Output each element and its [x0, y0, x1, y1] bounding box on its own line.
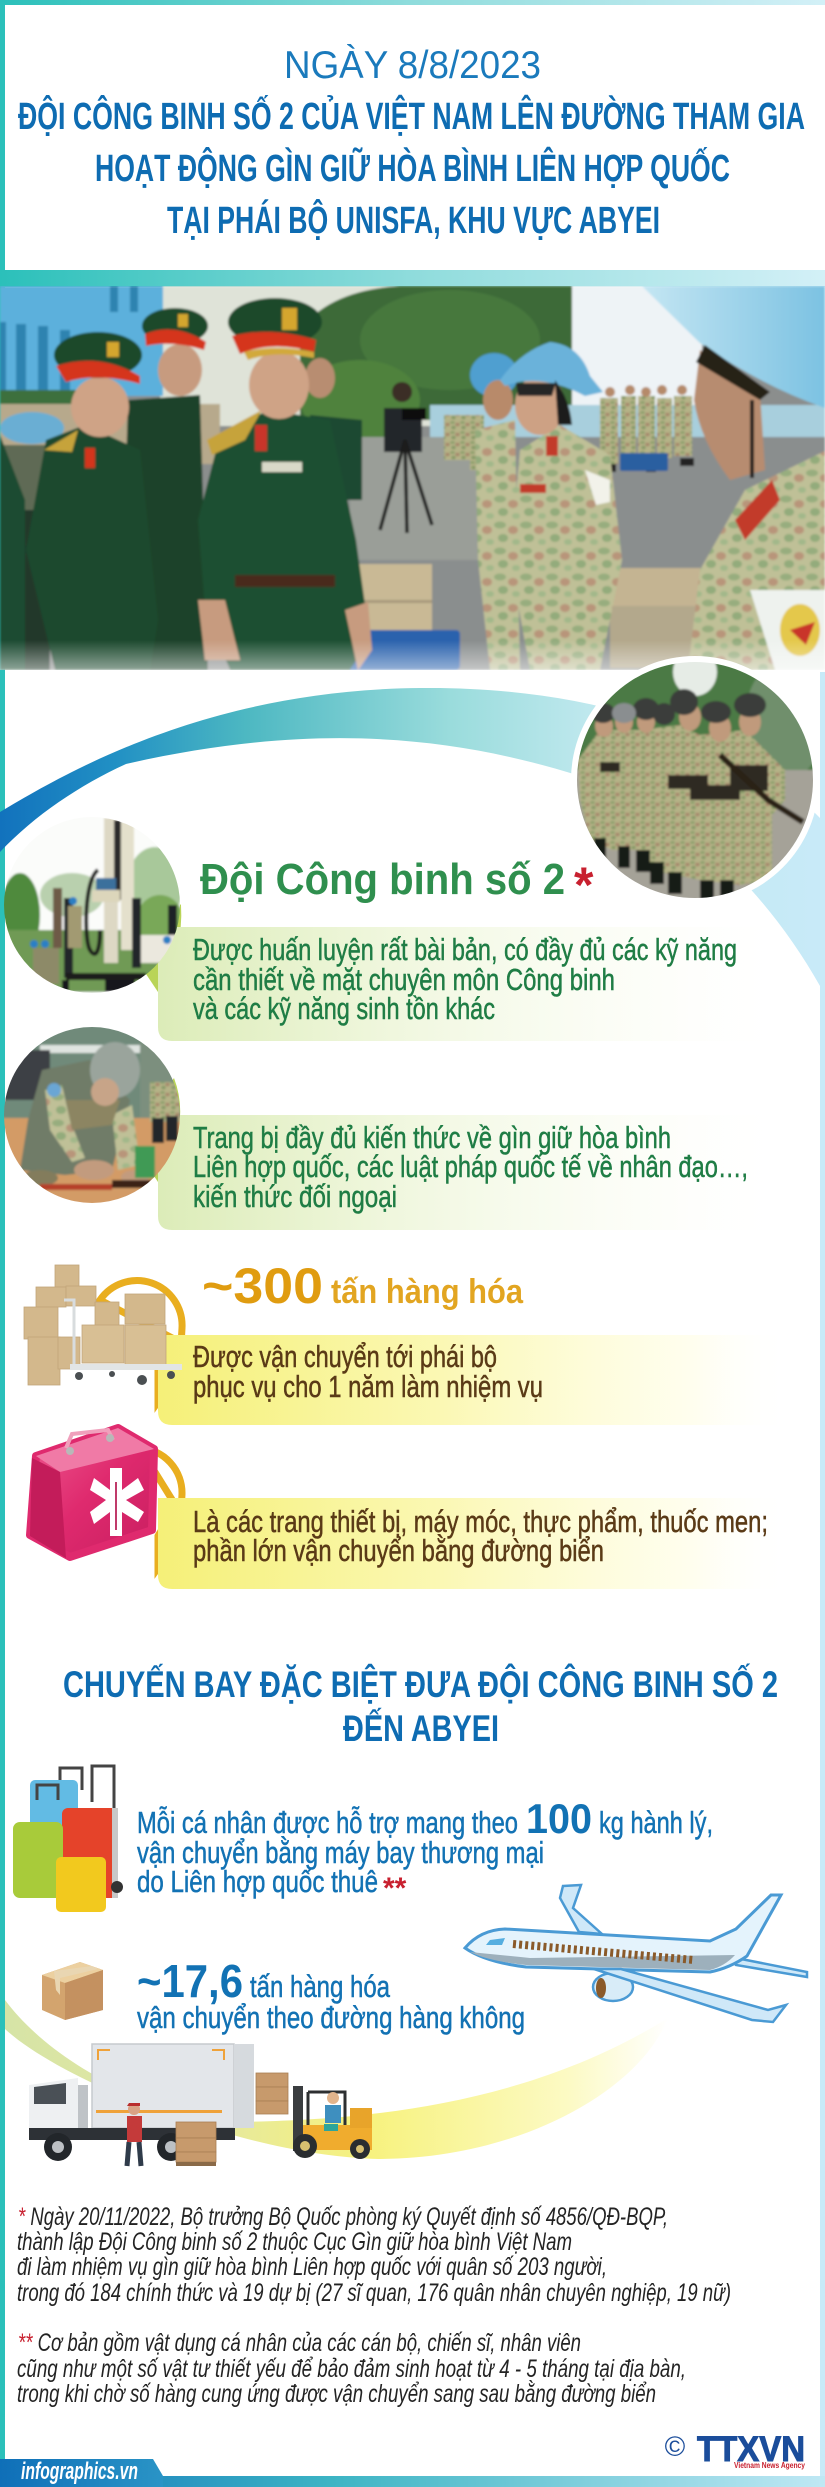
header panel — [5, 5, 825, 270]
teal band under header — [0, 270, 825, 287]
yellow box 1 — [158, 1335, 790, 1425]
circle photo: drilling rig — [4, 818, 180, 993]
woman soldier behind — [475, 420, 520, 670]
footnote 1: đi làm nhiệm vụ gìn giữ hòa bình Liên hợp quốc với quân số 203 người, — [17, 2253, 607, 2281]
footnote 1 — [17, 2203, 731, 2307]
footnote 2: ** Cơ bản gồm vật dụng cá nhân của các cán bộ, chiến sĩ, nhân viên — [18, 2329, 581, 2357]
luggage allowance text — [137, 1795, 713, 1905]
icon: pink medical kit — [30, 1428, 154, 1558]
footer tab — [0, 2459, 163, 2487]
box 2 text — [193, 1120, 748, 1214]
circle photo: demining soldier — [4, 1027, 180, 1203]
illustration: forklift — [293, 2086, 372, 2159]
right foreground hat — [642, 286, 825, 408]
section title: Đội Công binh số 2: Đội Công binh số 2 — [200, 855, 565, 904]
section heading: special flight — [63, 1663, 778, 1749]
box 2 text: kiến thức đối ngoại — [193, 1179, 397, 1214]
air freight text: ~17,6 — [137, 1955, 243, 2007]
red asterisk: * — [574, 857, 594, 913]
yellow curved swoosh — [5, 2000, 668, 2159]
heading: ~300 tấn hàng hóa: ~300 — [202, 1258, 323, 1314]
box 1 text — [193, 932, 737, 1026]
box 2 text: Trang bị đầy đủ kiến thức về gìn giữ hòa bình — [193, 1120, 671, 1155]
icon: single cardboard box — [42, 1962, 103, 2020]
yellow box 2 text — [193, 1504, 768, 1568]
footer bar — [0, 2458, 825, 2487]
luggage allowance text: kg hành lý, — [599, 1805, 713, 1840]
luggage allowance text: ** — [383, 1872, 407, 1905]
hero photo: officers greeting peacekeepers — [0, 286, 825, 670]
air freight text: tấn hàng hóa — [250, 1969, 391, 2004]
luggage allowance text: Mỗi cá nhân được hỗ trợ mang theo — [137, 1805, 518, 1840]
luggage allowance text: do Liên hợp quốc thuê — [137, 1864, 378, 1899]
gold pin 1 — [100, 1281, 182, 1402]
marching soldiers — [578, 725, 785, 885]
officer 2 — [120, 395, 208, 670]
illustration: pallets and worker — [127, 2073, 288, 2166]
site name: infographics.vn — [21, 2458, 138, 2485]
date line: NGÀY 8/8/2023 — [284, 44, 541, 87]
gold pin 2 — [140, 1448, 182, 1568]
heading: ~300 tấn hàng hóa: tấn hàng hóa — [331, 1273, 524, 1311]
illustration: truck — [29, 2044, 254, 2161]
logo: TTXVN: © — [665, 2431, 686, 2462]
curved swoosh background — [0, 688, 820, 986]
logo: TTXVN: Vietnam News Agency — [734, 2461, 805, 2470]
right foreground soldier — [694, 350, 765, 480]
officer far behind — [310, 415, 362, 500]
100 number: 100 — [526, 1795, 592, 1842]
green box 1 — [158, 927, 790, 1041]
officer 3 (centre) — [198, 410, 370, 670]
illustration: airplane — [465, 1885, 807, 2022]
luggage allowance text: vận chuyển bằng máy bay thương mại — [137, 1835, 544, 1870]
officer 1 — [26, 426, 129, 670]
footnote 2 — [17, 2329, 686, 2408]
yellow box 1 text — [193, 1339, 543, 1404]
icon: luggage — [13, 1766, 123, 1912]
faces and helmets — [595, 703, 761, 742]
cameraman — [384, 408, 422, 452]
woman soldier centre — [510, 425, 622, 670]
section heading: special flight: ĐẾN ABYEI — [343, 1708, 499, 1749]
circle photo: soldiers marching — [571, 656, 814, 898]
left blue hat soldier — [0, 412, 64, 444]
yellow box 1 text: Được vận chuyển tới phái bộ — [193, 1339, 497, 1374]
yellow box 2 text: phần lớn vận chuyển bằng đường biển — [193, 1533, 604, 1568]
footnote 1: thành lập Đội Công binh số 2 thuộc Cục Gìn giữ hòa bình Việt Nam — [17, 2228, 572, 2256]
logo: TTXVN: TTXVN — [697, 2430, 805, 2469]
air freight text: vận chuyển theo đường hàng không — [137, 2000, 525, 2035]
box 1 text: cần thiết về mặt chuyên môn Công binh — [193, 962, 615, 997]
mats and cases — [358, 562, 434, 632]
yellow box 2 — [158, 1498, 790, 1589]
background troops — [444, 396, 692, 470]
lime crescent behind photo 2 — [130, 1078, 180, 1182]
yellow box 1 text: phục vụ cho 1 năm làm nhiệm vụ — [193, 1369, 543, 1404]
heading: ~300 tấn hàng hóa — [202, 1258, 524, 1314]
lime crescent behind photo 1 — [130, 900, 181, 992]
vests and rifle — [600, 762, 768, 800]
air freight text — [137, 1955, 525, 2035]
box 1 text: và các kỹ năng sinh tồn khác — [193, 991, 495, 1026]
green box 2 — [158, 1115, 790, 1230]
icon: stacked cardboard boxes on trolley — [24, 1265, 182, 1385]
